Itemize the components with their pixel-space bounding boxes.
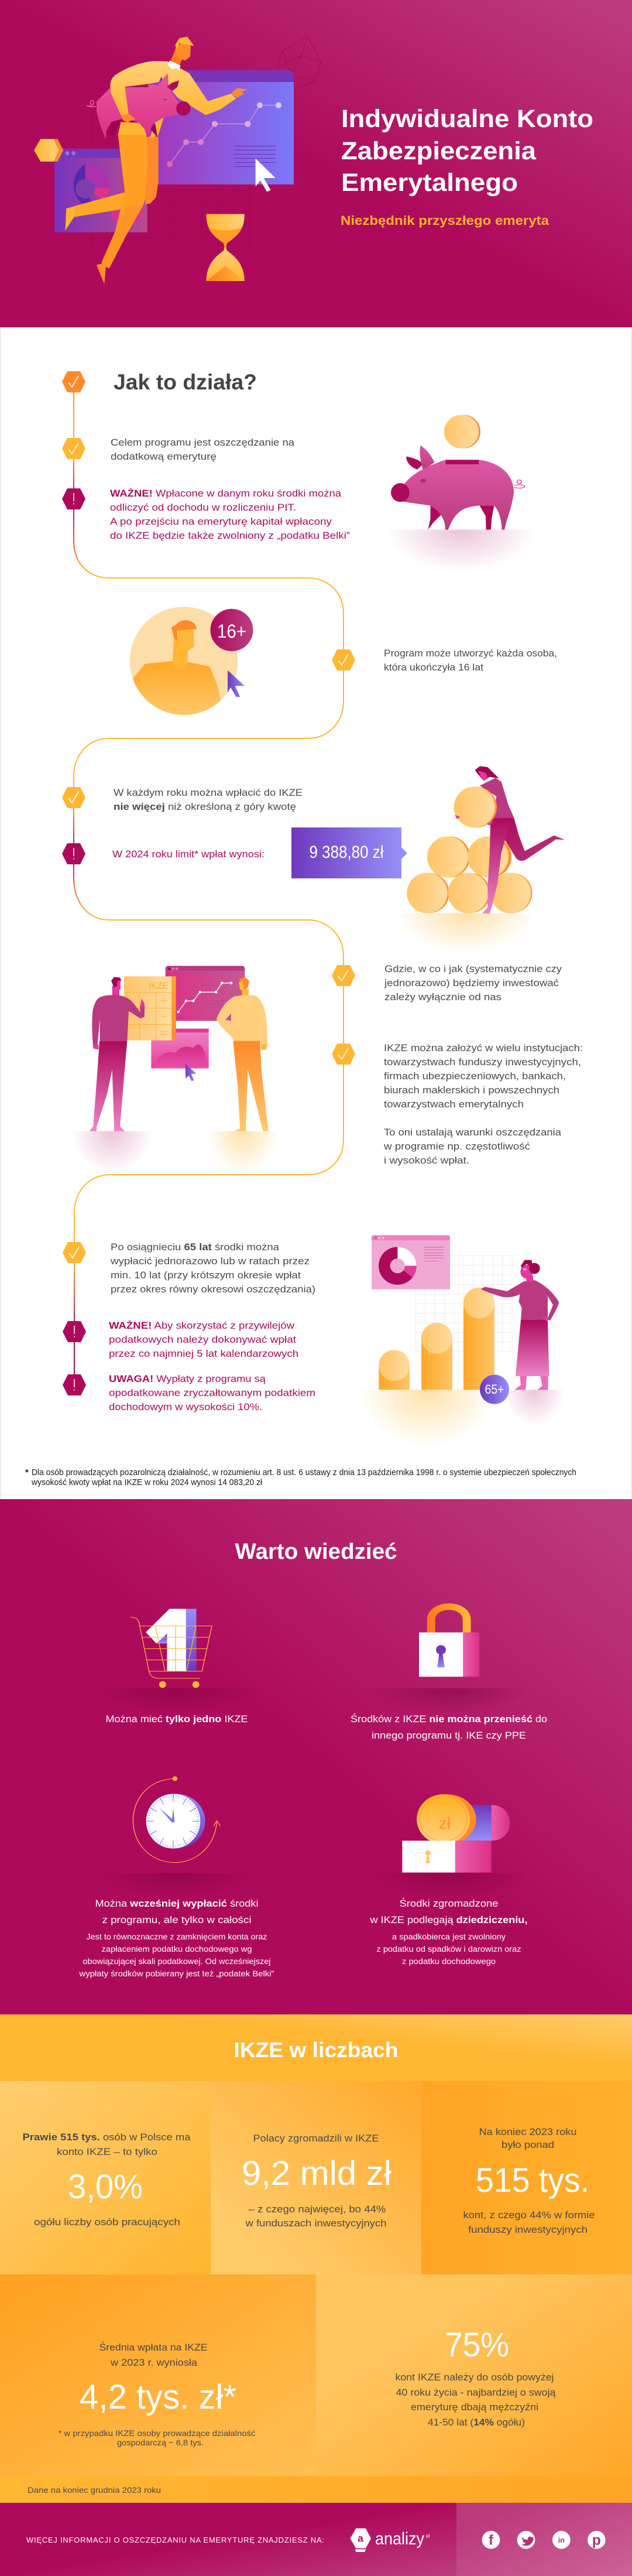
timeline path bbox=[74, 382, 344, 1385]
text block: tax privileges: przez co najmniej 5 lat kalendarzowych bbox=[109, 1348, 298, 1359]
stat card: 515 tys. bbox=[421, 2081, 632, 2274]
text block: flat tax: dochodowym w wysokości 10%. bbox=[109, 1401, 262, 1412]
text block: yearly limit: W każdym roku można wpłacić do IKZE bbox=[114, 787, 303, 798]
stat card: 3,0%: 3,0% bbox=[68, 2168, 143, 2206]
figure: piggy bank carried bbox=[87, 73, 191, 139]
footnote: Dla osób prowadzących pozarolniczą działalność, w rozumieniu art. 8 ust. 6 ustawy z dnia 13 października 1998 r. o systemie ubezpieczeń społecznych bbox=[32, 1468, 576, 1477]
text: inheritance: a spadkobierca jest zwolniony bbox=[392, 1932, 506, 1941]
text block: withdrawal after 65 bbox=[110, 1241, 315, 1295]
footnote bbox=[25, 1468, 576, 1487]
marker: important bbox=[62, 488, 85, 509]
text block: tax privileges bbox=[109, 1320, 298, 1359]
icon: facebook bbox=[482, 2531, 500, 2549]
text block: where and how: zależy wyłącznie od nas bbox=[384, 991, 502, 1003]
icon: hexagon bbox=[34, 139, 63, 162]
text: early withdrawal: z programu, ale tylko w całości bbox=[102, 1914, 252, 1925]
figure: torso and pointing arm bbox=[150, 61, 236, 138]
logo: analizy.pl bbox=[350, 2529, 430, 2552]
stat card: 515 tys.: kont, z czego 44% w formie bbox=[463, 2209, 595, 2221]
text block: institutions: towarzystwach emerytalnych bbox=[384, 1099, 524, 1110]
title bbox=[341, 105, 593, 197]
icon: twitter bbox=[517, 2531, 535, 2549]
text block: flat tax bbox=[109, 1373, 315, 1412]
text: early withdrawal bbox=[78, 1898, 274, 1978]
logo: analizy.pl: analizy bbox=[375, 2529, 424, 2548]
text block: yearly limit bbox=[114, 787, 303, 812]
badge label 16+: 16+ bbox=[217, 621, 246, 642]
icon: wall clock bbox=[20, 76, 68, 124]
stat card: 4,2 tys. zł: w 2023 r. wyniosła bbox=[110, 2357, 198, 2368]
stat card: 515 tys.: funduszy inwestycyjnych bbox=[468, 2224, 588, 2235]
text: inheritance: z podatku dochodowego bbox=[402, 1957, 496, 1966]
footnote: * bbox=[25, 1468, 29, 1477]
big chart window bbox=[142, 70, 294, 191]
logo: analizy.pl: pl bbox=[426, 2533, 430, 2539]
footer text: WIĘCEJ INFORMACJI O OSZCZĘDZANIU NA EMERYTURĘ ZNAJDZIESZ NA: bbox=[26, 2536, 324, 2544]
marker: check bbox=[332, 649, 355, 670]
stat card: 4,2 tys. zł: gospodarczą ~ 6,8 tys. bbox=[117, 2438, 204, 2447]
text block: goal bbox=[111, 437, 295, 462]
icon: pinterest: p bbox=[592, 2533, 601, 2548]
heading: Jak to działa? bbox=[114, 370, 257, 394]
callout: 2024 limit amount bbox=[291, 827, 407, 878]
text block: flat tax: opodatkowane zryczałtowanym podatkiem bbox=[109, 1387, 315, 1398]
marker: check bbox=[62, 787, 85, 808]
stat card: 75%: 41-50 lat (14% ogółu) bbox=[428, 2417, 525, 2428]
logo: analizy.pl: a bbox=[358, 2533, 363, 2544]
stat card: 9,2 mld zł: Polacy zgromadzili w IKZE bbox=[253, 2133, 379, 2144]
heading bbox=[0, 2014, 632, 2081]
text block: goal: dodatkową emeryturę bbox=[111, 451, 217, 462]
panel: footer bbox=[0, 2503, 632, 2576]
illustration: man carrying piggy bank bbox=[20, 37, 321, 284]
panel: worth knowing bbox=[0, 1499, 632, 2014]
stat card: 75%: 75% bbox=[445, 2326, 509, 2364]
text: inheritance bbox=[369, 1898, 528, 1966]
panel: hero bbox=[0, 0, 632, 327]
icon: clock with arrow bbox=[95, 1776, 259, 1899]
callout: 2024 limit amount: 9 388,80 zł bbox=[309, 843, 384, 862]
text: cannot transfer: innego programu tj. IKE czy PPE bbox=[372, 1730, 526, 1741]
text block: institutions: i wysokość wpłat. bbox=[384, 1155, 469, 1166]
text block: institutions: towarzystwach funduszy inwestycyjnych, bbox=[384, 1056, 581, 1068]
stat card: 9,2 mld zł: – z czego najwięcej, bo 44% bbox=[248, 2204, 386, 2215]
text block: tax privileges: WAŻNE! Aby skorzystać z przywilejów bbox=[109, 1320, 295, 1331]
stat card: 9,2 mld zł bbox=[211, 2081, 421, 2274]
stat card: 75%: emeryturę dbają mężczyźni bbox=[411, 2401, 538, 2413]
stat card: 4,2 tys. zł: 4,2 tys. zł* bbox=[80, 2378, 236, 2416]
icon: linkedin bbox=[552, 2531, 571, 2549]
illustration: piggy bank and coin bbox=[387, 415, 536, 572]
text block: important: do IKZE będzie także zwolniony z „podatku Belki” bbox=[110, 530, 350, 541]
text block: important: WAŻNE! Wpłacone w danym roku środki można bbox=[110, 488, 342, 499]
heading: Warto wiedzieć bbox=[235, 1540, 397, 1564]
text block: who can open bbox=[384, 648, 557, 673]
text: early withdrawal: Można wcześniej wypłacić środki bbox=[95, 1898, 259, 1909]
text: cannot transfer bbox=[351, 1713, 547, 1741]
icon: padlock bbox=[367, 1607, 531, 1714]
marker: important bbox=[63, 1374, 86, 1395]
text: inheritance: Środki zgromadzone bbox=[399, 1898, 499, 1909]
stat card: 75%: kont IKZE należy do osób powyżej bbox=[396, 2372, 554, 2383]
text block: where and how: jednorazowo) będziemy inwestować bbox=[384, 977, 559, 988]
text: early withdrawal: zapłaceniem podatku dochodowego wg bbox=[102, 1945, 252, 1954]
illustration: 16+ person bbox=[130, 607, 253, 717]
source note bbox=[0, 2476, 632, 2503]
illustration: woman stacking coins bbox=[396, 766, 565, 952]
illustration: woman with bar chart 65+ bbox=[359, 1235, 566, 1446]
footnote: wysokość kwoty wpłat na IKZE w roku 2024 wynosi 14 083,20 zł bbox=[31, 1478, 263, 1487]
marker: check bbox=[63, 1242, 86, 1263]
panel: IKZE in numbers bbox=[0, 2014, 632, 2503]
illustration: two men with calculator and charts: IKZE bbox=[149, 981, 168, 991]
title: Indywidualne Konto bbox=[341, 105, 593, 133]
text: inheritance: w IKZE podlegają dziedziczeniu, bbox=[369, 1914, 528, 1925]
panel: how it works bbox=[0, 327, 632, 1499]
stat card: 3,0%: Prawie 515 tys. osób w Polsce ma bbox=[22, 2132, 191, 2143]
text: cannot transfer: Środków z IKZE nie można przenieść do bbox=[351, 1713, 547, 1725]
stat card: 4,2 tys. zł: * w przypadku IKZE osoby prowadzące działalność bbox=[59, 2428, 255, 2438]
title: Emerytalnego bbox=[341, 169, 518, 197]
text block: withdrawal after 65: Po osiągnieciu 65 lat środki można bbox=[111, 1241, 280, 1253]
text block: important: odliczyć od dochodu w rozliczeniu PIT. bbox=[110, 502, 296, 513]
icon: wireframe cube bbox=[277, 37, 321, 92]
background grid bbox=[91, 95, 249, 254]
text: early withdrawal: Jest to równoznaczne z zamknięciem konta oraz bbox=[87, 1932, 267, 1941]
badge label 65+: 65+ bbox=[485, 1382, 504, 1397]
source note: Dane na koniec grudnia 2023 roku bbox=[28, 2485, 161, 2495]
icon: linkedin: in bbox=[558, 2536, 565, 2544]
text block: flat tax: UWAGA! Wypłaty z programu są bbox=[109, 1373, 266, 1384]
social icons bbox=[482, 2531, 606, 2549]
text block: important: A po przejściu na emeryturę kapitał wpłacony bbox=[110, 516, 332, 527]
text block: tax privileges: podatkowych należy dokonywać wpłat bbox=[109, 1334, 296, 1345]
text block: institutions: biurach maklerskich i powszechnych bbox=[384, 1085, 559, 1096]
stat card: 9,2 mld zł: 9,2 mld zł bbox=[242, 2154, 391, 2192]
stat card: 75%: 40 roku życia - najbardziej o swoją bbox=[396, 2387, 556, 2398]
text block: where and how bbox=[384, 963, 562, 1003]
text block: withdrawal after 65: przez okres równy okresowi oszczędzania) bbox=[111, 1284, 315, 1295]
figure: man's shoulder and arm over pig bbox=[110, 61, 248, 123]
text block: who can open: Program może utworzyć każda osoba, bbox=[384, 648, 557, 659]
heading marker bbox=[62, 371, 85, 392]
stat card: 4,2 tys. zł bbox=[0, 2274, 316, 2476]
marker: important bbox=[63, 1321, 86, 1342]
stat card: 3,0%: konto IKZE – to tylko bbox=[57, 2146, 157, 2157]
icon: hourglass bbox=[207, 214, 245, 281]
heading: IKZE w liczbach bbox=[234, 2038, 398, 2062]
icon: pinterest bbox=[588, 2531, 606, 2549]
text: 2024 limit label: W 2024 roku limit* wpłat wynosi: bbox=[112, 849, 265, 860]
stat card: 3,0%: ogółu liczby osób pracujących bbox=[34, 2216, 180, 2228]
figure: man's head bbox=[167, 37, 194, 71]
subtitle: Niezbędnik przyszłego emeryta bbox=[341, 213, 549, 228]
stat card: 75% bbox=[316, 2274, 632, 2476]
text block: who can open: która ukończyła 16 lat bbox=[384, 662, 483, 673]
marker: check bbox=[332, 965, 355, 986]
marker: important bbox=[62, 843, 85, 864]
stat card: 515 tys.: było ponad bbox=[502, 2139, 554, 2150]
text block: withdrawal after 65: min. 10 lat (przy krótszym okresie wpłat bbox=[111, 1270, 301, 1281]
stat card: 9,2 mld zł: w funduszach inwestycyjnych bbox=[245, 2218, 386, 2229]
marker: check bbox=[62, 438, 85, 459]
figure: man's rear leg bbox=[66, 192, 125, 230]
icon: coin in chest bbox=[367, 1794, 531, 1899]
text: only one account: Można mieć tylko jedno IKZE bbox=[105, 1713, 248, 1725]
text block: yearly limit: nie więcej niż określoną z góry kwotę bbox=[114, 801, 296, 812]
figure: man's pants bbox=[97, 122, 159, 284]
text block: institutions: IKZE można założyć w wielu instytucjach: bbox=[384, 1042, 583, 1053]
stat card: 4,2 tys. zł: Średnia wpłata na IKZE bbox=[99, 2342, 207, 2353]
stat card: 3,0% bbox=[0, 2081, 211, 2274]
text: inheritance: z podatku od spadków i darowizn oraz bbox=[377, 1945, 521, 1954]
icon: coin in chest: zł bbox=[439, 1814, 451, 1832]
stat card: 515 tys.: 515 tys. bbox=[476, 2161, 589, 2199]
text block: goal: Celem programu jest oszczędzanie na bbox=[111, 437, 295, 448]
title: Zabezpieczenia bbox=[341, 137, 537, 165]
text: early withdrawal: wypłaty środków pobierany jest też „podatek Belki” bbox=[78, 1969, 274, 1978]
text block: institutions bbox=[383, 1042, 583, 1166]
marker: check bbox=[332, 1044, 355, 1065]
text block: withdrawal after 65: wypłacić jednorazowo lub w ratach przez bbox=[110, 1255, 310, 1267]
text block: institutions: To oni ustalają warunki oszczędzania bbox=[384, 1127, 562, 1138]
icon: facebook: f bbox=[489, 2533, 494, 2548]
text block: where and how: Gdzie, w co i jak (systematycznie czy bbox=[384, 963, 562, 974]
text: early withdrawal: obowiązującej skali podatkowej. Od wcześniejszej bbox=[83, 1957, 270, 1966]
icon: shopping cart with number one bbox=[95, 1609, 259, 1714]
illustration: two men with calculator and charts bbox=[71, 966, 279, 1174]
text block: institutions: firmach ubezpieczeniowych, bankach, bbox=[384, 1070, 566, 1082]
text block: important bbox=[110, 488, 350, 541]
text block: institutions: w programie np. częstotliwość bbox=[383, 1141, 531, 1152]
small donut window bbox=[54, 149, 147, 232]
stat card: 515 tys.: Na koniec 2023 roku bbox=[479, 2126, 577, 2137]
